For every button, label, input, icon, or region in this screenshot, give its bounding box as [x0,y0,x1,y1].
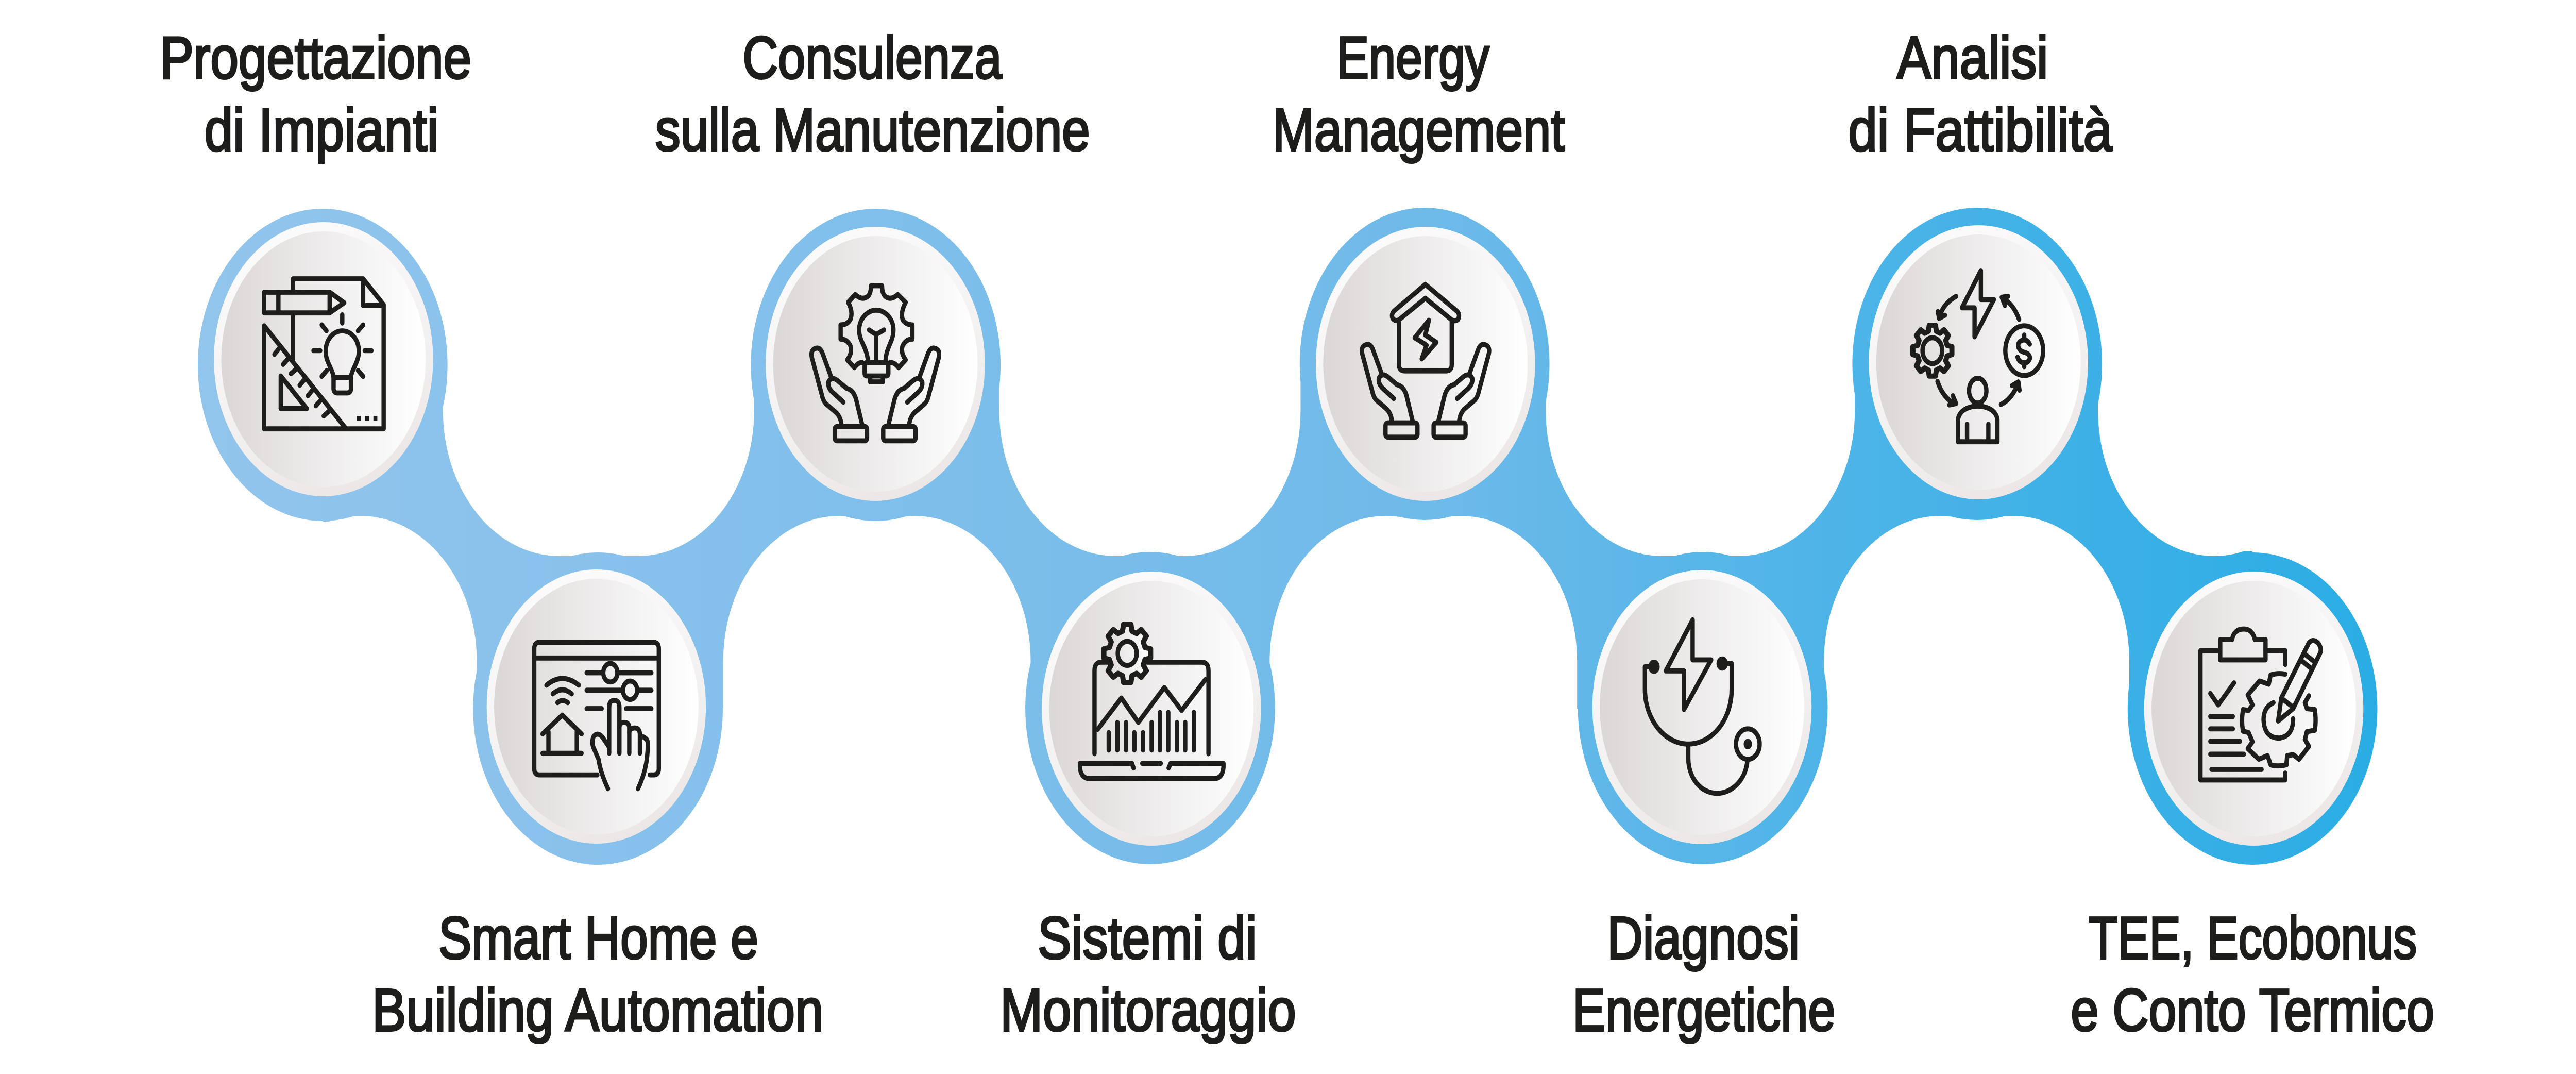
disc 5 [1316,227,1535,501]
label: Diagnosi Energetiche: Energetiche [1572,977,1836,1044]
label: Consulenza sulla Manutenzione: Consulenza [742,25,1002,91]
label: Sistemi di Monitoraggio [1000,905,1296,1044]
icon: hands holding gear and bulb [811,286,939,441]
label: TEE, Ecobonus e Conto Termico: TEE, Ecobonus [2089,905,2417,971]
label: Consulenza sulla Manutenzione [655,25,1090,163]
label: Analisi di Fattibilità [1848,25,2113,163]
disc 4 [1042,572,1261,846]
disc 2 [487,569,706,844]
disc 3 [766,227,985,501]
icon: smart home control panel [534,642,659,788]
label: Energy Management: Management [1273,97,1565,163]
label: Progettazione di Impianti: Progettazione [160,25,471,91]
icon: stethoscope with bolt [1645,620,1759,793]
label: Diagnosi Energetiche: Diagnosi [1607,905,1800,971]
icon: monitoring laptop [1080,624,1224,779]
icon: blueprint with bulb [264,279,384,429]
label: TEE, Ecobonus e Conto Termico: e Conto Termico [2071,977,2434,1044]
label: Sistemi di Monitoraggio: Sistemi di [1038,905,1257,971]
icon: hands holding energy house [1362,284,1489,437]
label: TEE, Ecobonus e Conto Termico [2071,905,2434,1044]
label: Smart Home e Building Automation: Building Automation [372,977,823,1044]
label: Smart Home e Building Automation: Smart Home e [438,905,758,971]
icon: feasibility cycle [1913,271,2043,442]
disc 1 [214,222,433,496]
label: Energy Management [1273,25,1565,163]
label: Energy Management: Energy [1337,25,1489,91]
icon: clipboard with gear and pencil [2200,629,2321,780]
connecting wave band [198,208,2377,865]
label: Sistemi di Monitoraggio: Monitoraggio [1000,977,1296,1044]
label: Analisi di Fattibilità: Analisi [1897,25,2048,91]
label: Consulenza sulla Manutenzione: sulla Manutenzione [655,97,1090,163]
label: Progettazione di Impianti: di Impianti [205,97,438,163]
label: Diagnosi Energetiche [1572,905,1836,1044]
label: Analisi di Fattibilità: di Fattibilità [1848,97,2113,163]
disc 7 [1869,225,2088,499]
label: Smart Home e Building Automation [372,905,823,1044]
disc 8 [2144,572,2363,846]
label: Progettazione di Impianti [160,25,471,163]
disc 6 [1592,570,1811,844]
